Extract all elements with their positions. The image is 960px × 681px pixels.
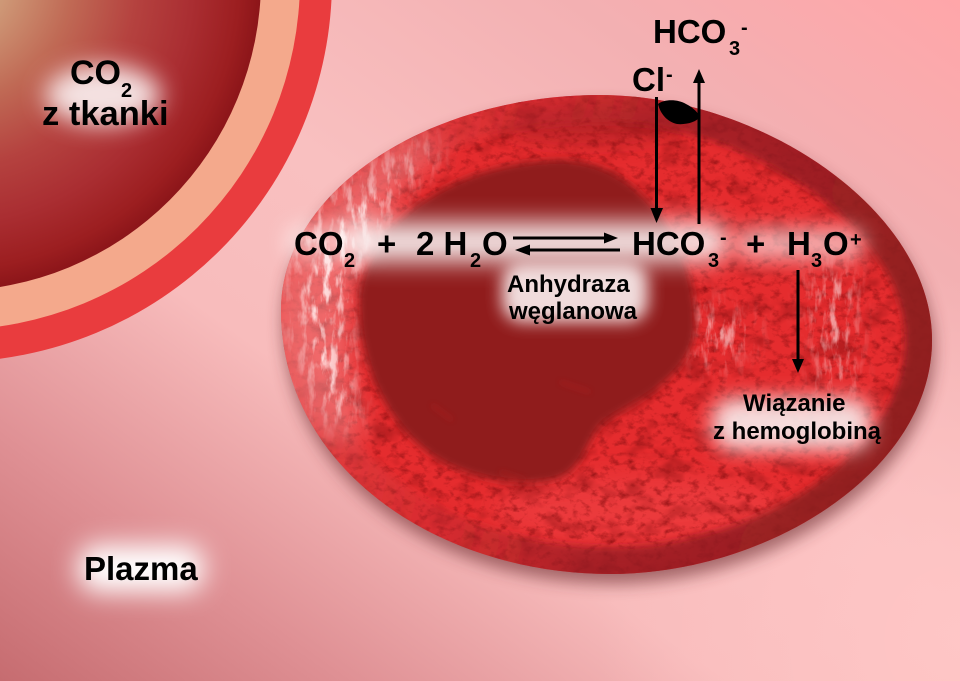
CO2: CO: [294, 225, 344, 262]
cell texture: [270, 85, 940, 585]
arrow: chloride into cell: [650, 97, 663, 223]
label: CO2 from tissue: [42, 54, 169, 133]
dimple streaks: [432, 382, 590, 480]
H3O+: H: [787, 225, 811, 262]
left pale veil: [275, 130, 445, 440]
label: CO2 from tissue: CO: [70, 54, 121, 92]
plus: +: [746, 225, 765, 262]
right highlights: [690, 300, 760, 370]
label: carbonic anhydrase: węglanowa: [508, 298, 638, 325]
glow: equation band: [345, 222, 730, 262]
label: chloride: Cl: [632, 61, 665, 98]
label: HCO3- outside: HCO: [653, 13, 726, 50]
H3O+: [787, 225, 862, 272]
2 H2O: O: [482, 225, 508, 262]
H3O+: 3: [811, 250, 822, 272]
arrow: bicarbonate out of cell: [693, 69, 705, 224]
2 H2O: [416, 225, 508, 272]
glow: tissue label: [45, 65, 161, 125]
plus: +: [377, 225, 396, 262]
dark area on the upper ring: [500, 107, 680, 143]
large dark mottling: [282, 95, 905, 573]
label: plasma: Plazma: [84, 550, 198, 587]
label: carbonic anhydrase: [507, 271, 638, 325]
equilibrium arrows: [513, 232, 620, 256]
HCO3-: [632, 225, 727, 272]
CO2: [294, 225, 355, 272]
CO2: 2: [344, 250, 355, 272]
icon: membrane exchanger: [658, 100, 700, 124]
glow: anhydraza label: [502, 262, 648, 322]
label: HCO3- outside: -: [741, 17, 748, 39]
soft lighter patches: [502, 478, 772, 541]
2 H2O: 2 H: [416, 225, 467, 262]
label: HCO3- outside: 3: [729, 38, 740, 60]
arrow: H3O+ to hemoglobin: [792, 270, 804, 373]
HCO3-: HCO: [632, 225, 705, 262]
glow: hemoglobin label: [712, 398, 872, 450]
H3O+: +: [850, 229, 862, 251]
glow: plasma label: [78, 545, 204, 592]
glow: CO2 label: [285, 225, 375, 259]
label: hemoglobin binding: [713, 390, 882, 445]
blood vessel wall: [0, 0, 332, 362]
right highlights 2: [812, 270, 850, 400]
label: chloride: -: [666, 64, 673, 86]
2 H2O: 2: [470, 250, 481, 272]
cell rim: [281, 95, 932, 574]
left highlights: [289, 142, 440, 425]
equation: [294, 225, 862, 272]
label: HCO3- outside: [653, 13, 748, 60]
HCO3-: 3: [708, 250, 719, 272]
label: hemoglobin binding: Wiązanie: [743, 390, 845, 417]
label: CO2 from tissue: z tkanki: [42, 95, 169, 133]
label: carbonic anhydrase: Anhydraza: [507, 271, 630, 298]
cell shadow: [283, 105, 934, 584]
label: CO2 from tissue: 2: [121, 80, 132, 102]
cell body: [270, 85, 940, 585]
red blood cell: [270, 85, 940, 585]
glow: H3O label: [735, 228, 865, 260]
central dimple: [359, 160, 696, 483]
label: hemoglobin binding: z hemoglobiną: [713, 418, 882, 445]
HCO3-: -: [720, 227, 727, 249]
H3O+: O: [823, 225, 849, 262]
